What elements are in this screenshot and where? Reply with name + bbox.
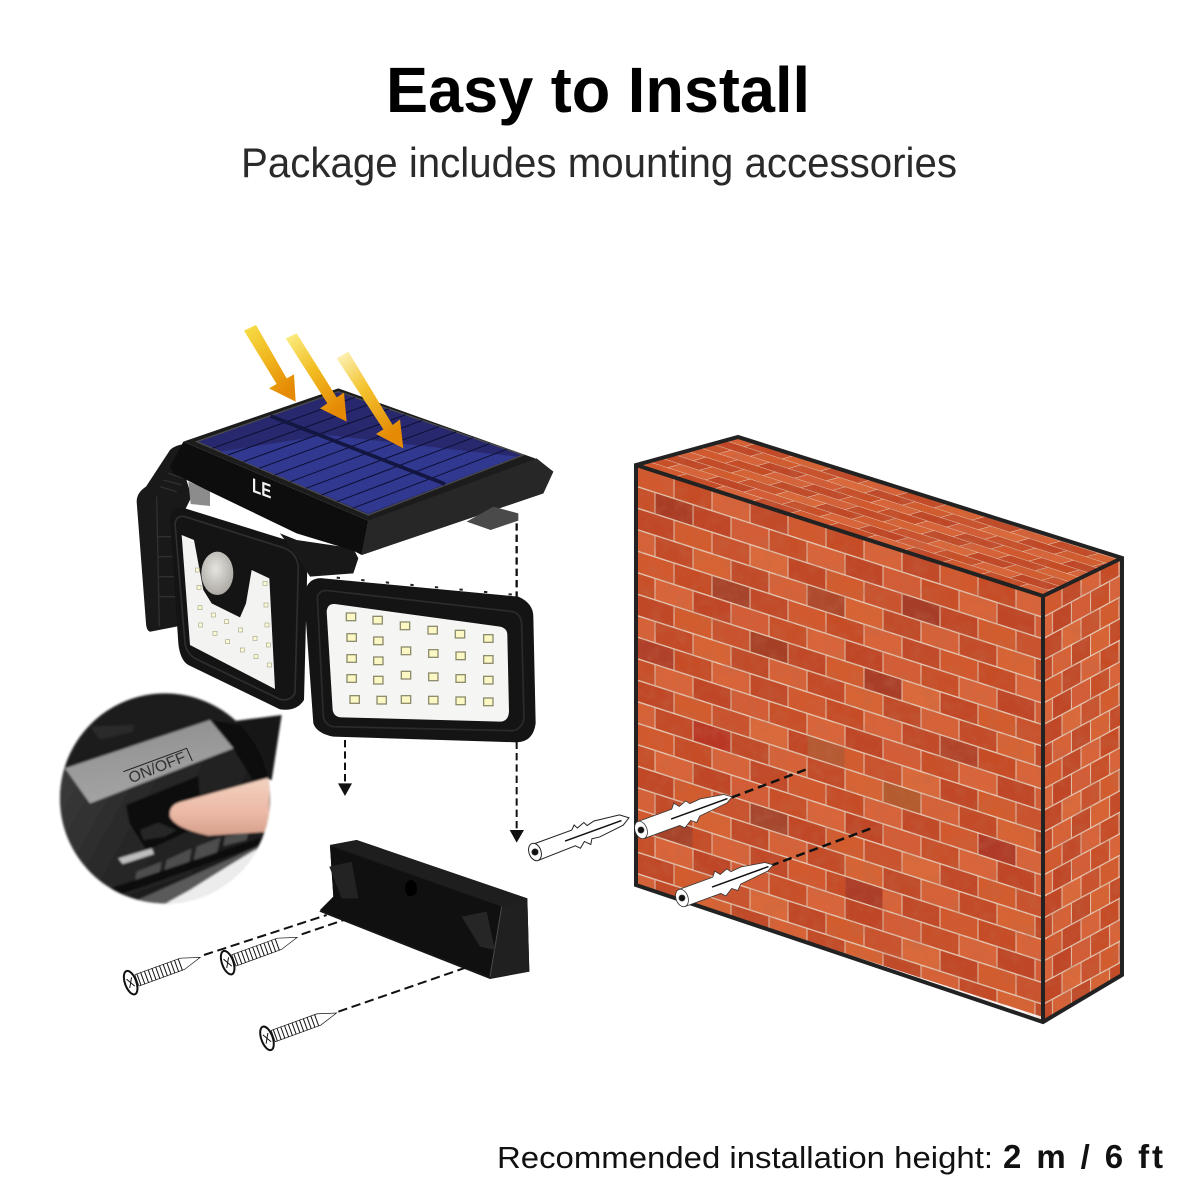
- wall anchors with dashed lines: [525, 768, 872, 912]
- brick wall: [634, 434, 1124, 1024]
- title: Easy to Install: [386, 54, 810, 126]
- bracket clip left: [329, 862, 358, 898]
- switch recess: [126, 776, 202, 851]
- sunlight arrow 2: [286, 333, 347, 422]
- footer note: [497, 1138, 1163, 1175]
- wall: outline: [636, 437, 1122, 1022]
- dashed guide behind bracket: [513, 523, 520, 597]
- dashed guide lower: [770, 828, 872, 866]
- mounting bracket: [319, 840, 529, 979]
- switch housing silver strip: [65, 720, 233, 803]
- bracket screw hole: [405, 880, 417, 897]
- finger: [170, 777, 270, 836]
- on/off switch magnifier callout: [57, 690, 282, 910]
- right panel LEDs: [346, 613, 493, 706]
- recommended height value: 2 m / 6 ft: [1003, 1138, 1163, 1175]
- recommended height label: Recommended installation height:: [497, 1140, 993, 1175]
- callout, bracket, screws and guides: [57, 690, 529, 1052]
- light base white: [166, 848, 258, 905]
- solar light product: [137, 325, 553, 742]
- dashed guide upper: [640, 768, 810, 832]
- dashed guide lines for screws: [204, 896, 473, 1012]
- wall: brick mottling: [630, 430, 1130, 1030]
- key row: [134, 833, 249, 882]
- screw 1: [121, 946, 204, 996]
- motion sensor: [201, 552, 233, 595]
- subtitle: Package includes mounting accessories: [241, 139, 957, 186]
- right light panel: [304, 578, 536, 742]
- screw 2: [218, 926, 301, 976]
- screw 3: [257, 1001, 341, 1052]
- down arrow to bracket: [338, 740, 352, 796]
- solar panel housing: [170, 388, 553, 555]
- hinge: [280, 533, 358, 577]
- solar cells: [197, 392, 523, 515]
- anchor: outside wall: [525, 807, 633, 865]
- solar center bar: [271, 416, 445, 484]
- wall: top face: [642, 439, 1117, 594]
- back light panel: [137, 444, 192, 632]
- sunlight arrow 3: [337, 352, 403, 448]
- anchor: entering wall upper: [631, 784, 737, 844]
- left light panel: [170, 507, 307, 710]
- sunlight arrow 1: [244, 325, 296, 402]
- switch housing body: [57, 748, 263, 897]
- wall: side face: [1045, 561, 1120, 1018]
- bracket clip right: [462, 912, 495, 950]
- wall: front face: [636, 465, 1043, 1017]
- anchor: entering wall lower: [672, 852, 778, 912]
- hinge arm: [188, 482, 210, 506]
- brand logo: LE: [252, 474, 271, 504]
- down arrow to wall anchors: [510, 742, 524, 843]
- underside sensor foot: [467, 507, 518, 530]
- solar reflection: [220, 435, 517, 513]
- left panel LEDs: [195, 568, 271, 667]
- solar cell grid: [212, 397, 507, 508]
- on/off label: ON/OFF: [126, 749, 188, 787]
